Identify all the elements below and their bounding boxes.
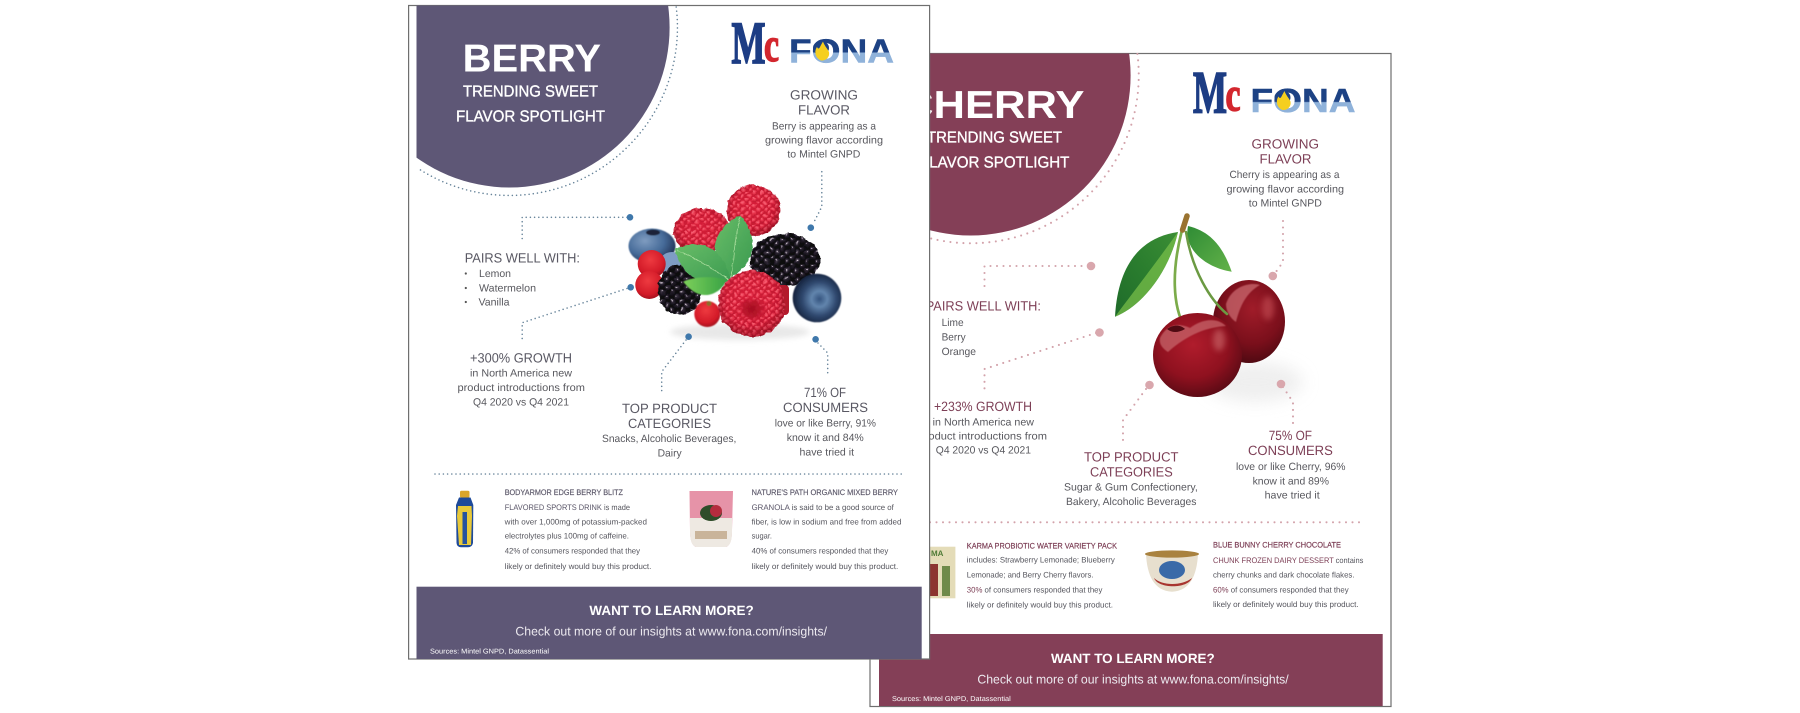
growing flavor text: GROWING — [1252, 136, 1319, 151]
product image: Blue Bunny dessert cup — [1145, 550, 1199, 592]
left blueberry — [628, 228, 676, 264]
front cherry — [1153, 313, 1242, 397]
consumers stat text — [1236, 428, 1346, 502]
front raspberry — [718, 270, 785, 336]
cherry title block — [902, 84, 1084, 171]
berry title block — [456, 38, 605, 125]
pairs well with text — [926, 298, 1041, 358]
growing flavor text — [1226, 136, 1344, 209]
logo: McCormick FONA — [732, 10, 894, 76]
logo: McCormick FONA: c — [1226, 68, 1240, 122]
product text: Nature's Path: likely or definitely would buy this product. — [752, 562, 898, 571]
connector: consumers — [1277, 380, 1293, 424]
product text: BodyArmor: electrolytes plus 100mg of caffeine. — [505, 532, 629, 541]
product text: Karma: likely or definitely would buy this product. — [967, 601, 1113, 610]
product text: BodyArmor: FLAVORED SPORTS DRINK is made — [505, 503, 631, 512]
top product categories text: Snacks, Alcoholic Beverages, — [602, 433, 736, 445]
growth stat text: +300% GROWTH — [470, 350, 572, 365]
logo: McCormick FONA: FONA — [1250, 83, 1356, 120]
consumers stat text: love or like Berry, 91% — [775, 418, 876, 430]
product text: Blue Bunny: CHUNK FROZEN DAIRY DESSERT contains — [1213, 556, 1363, 565]
left blackberry — [658, 264, 702, 316]
growth stat text: product introductions from — [918, 431, 1047, 443]
product text: BodyArmor: 42% of consumers responded that they — [505, 547, 640, 556]
right blueberry — [793, 274, 841, 322]
growth stat text: in North America new — [470, 368, 572, 380]
cherry shadow — [1207, 362, 1303, 402]
upper currant — [638, 250, 666, 278]
product text: BodyArmor: BODYARMOR EDGE BERRY BLITZ — [505, 488, 623, 497]
connector: pairs well with — [984, 262, 1095, 290]
growth stat text: in North America new — [933, 416, 1034, 428]
consumers stat text: CONSUMERS — [1248, 443, 1333, 458]
berry dotted arc — [417, 7, 677, 195]
top product categories text: TOP PRODUCT — [1084, 450, 1178, 465]
pairs well with text: Watermelon — [479, 282, 536, 294]
growth stat text: product introductions from — [458, 382, 585, 394]
berry title block: FLAVOR SPOTLIGHT — [456, 108, 605, 125]
berry footer banner: WANT TO LEARN MORE? — [589, 603, 754, 618]
product text: Nature's Path: NATURE'S PATH ORGANIC MIXED BERRY — [752, 488, 899, 497]
lower mint leaf — [683, 277, 727, 295]
logo: McCormick FONA: M — [732, 10, 766, 76]
product image: Karma water pack — [911, 547, 955, 598]
growing flavor text: growing flavor according — [1226, 183, 1344, 195]
pairs well with text: Vanilla — [478, 296, 510, 308]
pairs well with text: Berry — [942, 332, 966, 344]
product text: BodyArmor — [504, 488, 651, 571]
consumers stat text: have tried it — [1265, 490, 1320, 502]
growing flavor text: to Mintel GNPD — [787, 149, 861, 161]
right blackberry — [750, 234, 820, 286]
red berry piece — [775, 285, 789, 315]
lower currant — [635, 271, 663, 299]
product text: Blue Bunny — [1213, 541, 1363, 609]
illustration: mixed berries — [628, 185, 841, 340]
upright mint leaf — [715, 215, 753, 277]
pairs well with text: Lime — [942, 317, 964, 329]
consumers stat text: know it and 84% — [787, 432, 864, 444]
connector: growth — [984, 328, 1104, 390]
top right raspberry — [726, 185, 780, 236]
cherry footer banner — [879, 634, 1383, 706]
product text: Nature's Path: 40% of consumers responded that they — [752, 547, 888, 556]
logo: McCormick FONA — [1193, 60, 1356, 126]
pairs well with text: PAIRS WELL WITH: — [926, 298, 1041, 314]
connector: consumers — [812, 336, 828, 376]
connector: growth — [522, 284, 634, 342]
left leaf — [1115, 232, 1178, 317]
top product categories text: CATEGORIES — [628, 416, 711, 431]
product text: Karma: Lemonade; and Berry Cherry flavors. — [967, 571, 1094, 580]
connector: growing flavor — [808, 172, 822, 231]
bottom currant — [694, 301, 720, 327]
pairs well with text: Lemon — [479, 268, 511, 280]
growth stat text: Q4 2020 vs Q4 2021 — [936, 445, 1031, 457]
product text: Karma: KARMA PROBIOTIC WATER VARIETY PACK — [967, 541, 1118, 550]
product image: BodyArmor bottle — [456, 491, 473, 547]
consumers stat text: have tried it — [800, 446, 854, 458]
cherry title block: FLAVOR SPOTLIGHT — [920, 154, 1070, 171]
small hidden blueberry — [659, 252, 685, 276]
top product categories text — [602, 401, 736, 460]
product text: Blue Bunny: likely or definitely would buy this product. — [1213, 600, 1359, 609]
cherry page frame — [870, 54, 1391, 706]
connector: pairs well with — [522, 214, 633, 241]
connector: growing flavor — [1268, 221, 1283, 280]
berry title block: BERRY — [463, 38, 601, 80]
top product categories text: TOP PRODUCT — [622, 401, 717, 416]
illustration: cherries — [1115, 216, 1303, 402]
consumers stat text: 71% OF — [804, 385, 846, 400]
growth stat text: Q4 2020 vs Q4 2021 — [473, 396, 569, 408]
stems — [1175, 216, 1227, 328]
panel: cherry flyer — [869, 52, 1392, 708]
growth stat text — [918, 399, 1047, 457]
berry shadow — [670, 324, 810, 340]
product text: Karma — [967, 541, 1118, 610]
berry title block: TRENDING SWEET — [463, 84, 598, 101]
product text: BodyArmor: likely or definitely would buy this product. — [505, 562, 651, 571]
cherry title block: CHERRY — [902, 84, 1084, 127]
product image: Nature's Path granola bag — [690, 491, 733, 547]
cherry header circle — [930, 54, 1131, 236]
consumers stat text: know it and 89% — [1253, 475, 1329, 487]
cherry footer banner: Sources: Mintel GNPD, Datassential — [892, 695, 1011, 703]
growing flavor text: Cherry is appearing as a — [1230, 169, 1340, 181]
growing flavor text: FLAVOR — [798, 103, 850, 118]
product text: Nature's Path: sugar. — [752, 532, 772, 541]
pairs well with text: PAIRS WELL WITH: — [465, 250, 580, 265]
back cherry — [1213, 280, 1285, 363]
logo: McCormick FONA: FONA — [789, 34, 894, 70]
pairs well with text — [465, 250, 580, 308]
berry footer banner: Check out more of our insights at www.fona.com/insights/ — [515, 624, 828, 638]
top product categories text: Bakery, Alcoholic Beverages — [1066, 496, 1196, 508]
berry page frame — [409, 6, 930, 659]
product text: Nature's Path: fiber, is low in sodium and free from added — [752, 517, 901, 526]
product text: Blue Bunny: cherry chunks and dark chocolate flakes. — [1213, 571, 1354, 580]
growing flavor text: GROWING — [790, 87, 858, 102]
right leaf — [1187, 226, 1232, 272]
product text: Nature's Path — [752, 488, 901, 571]
growth stat text: +233% GROWTH — [934, 399, 1032, 414]
berry footer banner — [416, 587, 922, 659]
consumers stat text — [775, 385, 876, 458]
top product categories text: Dairy — [658, 448, 682, 460]
growing flavor text: FLAVOR — [1260, 151, 1312, 166]
top product categories text: Sugar & Gum Confectionery, — [1064, 482, 1198, 494]
product text: Karma: includes: Strawberry Lemonade; Blueberry — [967, 556, 1115, 565]
product image: Karma water pack: MA — [931, 549, 944, 558]
cherry footer banner: Check out more of our insights at www.fona.com/insights/ — [977, 672, 1289, 686]
consumers stat text: love or like Cherry, 96% — [1236, 461, 1346, 473]
connector: top categories — [662, 333, 692, 393]
berry header circle — [416, 6, 670, 188]
cherry footer banner: WANT TO LEARN MORE? — [1051, 651, 1215, 666]
top product categories text — [1064, 450, 1198, 508]
growing flavor text — [765, 87, 883, 161]
product text: Karma: 30% of consumers responded that they — [967, 586, 1102, 595]
growing flavor text: to Mintel GNPD — [1249, 197, 1322, 209]
growth stat text — [458, 350, 585, 408]
growing flavor text: Berry is appearing as a — [772, 120, 876, 132]
panel: berry flyer — [408, 4, 930, 660]
pairs well with text: Orange — [942, 346, 976, 358]
product text: Nature's Path: GRANOLA is said to be a good source of — [752, 503, 895, 512]
product text: Blue Bunny: 60% of consumers responded that they — [1213, 586, 1349, 595]
berry footer banner: Sources: Mintel GNPD, Datassential — [430, 647, 549, 655]
top left raspberry — [674, 208, 730, 254]
cherry dotted arc — [929, 54, 1139, 243]
connector: top categories — [1123, 381, 1154, 441]
left mint leaf — [675, 244, 731, 283]
logo: McCormick FONA: c — [764, 19, 779, 72]
consumers stat text: CONSUMERS — [783, 400, 868, 415]
growing flavor text: growing flavor according — [765, 135, 883, 147]
product text: Blue Bunny: BLUE BUNNY CHERRY CHOCOLATE — [1213, 541, 1341, 550]
top product categories text: CATEGORIES — [1090, 465, 1173, 480]
product text: BodyArmor: with over 1,000mg of potassium-packed — [504, 517, 647, 526]
consumers stat text: 75% OF — [1269, 428, 1312, 443]
cherry title block: TRENDING SWEET — [927, 130, 1062, 147]
logo: McCormick FONA: M — [1193, 60, 1227, 126]
